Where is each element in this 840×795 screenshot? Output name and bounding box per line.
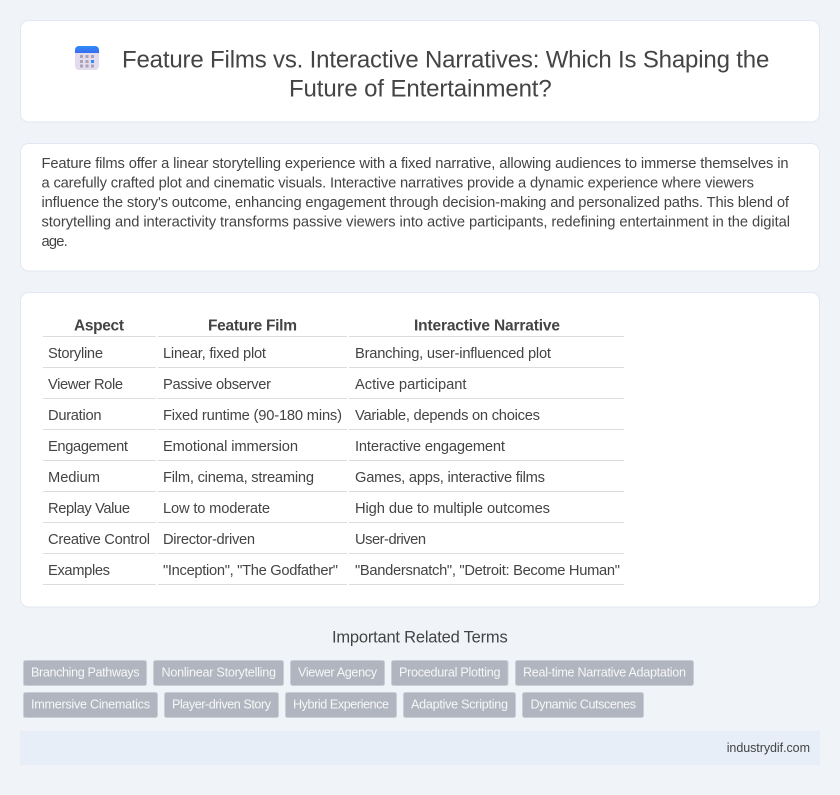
chip: immersive cinematics: Immersive Cinematics (31, 698, 150, 712)
table row: replay value: Replay Value (48, 501, 130, 517)
table row: duration: Fixed runtime (90-180 mins) (163, 408, 342, 424)
table row: creative control: Director-driven (163, 532, 255, 548)
chip: player-driven story: Player-driven Story (172, 698, 272, 712)
table row: creative control: User-driven (355, 532, 426, 548)
chip: branching pathways: Branching Pathways (31, 666, 140, 680)
title: Future of Entertainment? (289, 76, 552, 103)
table row: examples: "Bandersnatch", "Detroit: Become Human" (355, 563, 620, 579)
table row: medium: Games, apps, interactive films (355, 470, 545, 486)
title (122, 46, 769, 103)
table row: examples (48, 563, 620, 579)
chip: real-time narrative adaptation (516, 660, 694, 686)
table row: examples: Examples (48, 563, 110, 579)
table row: medium (48, 470, 545, 486)
table row: viewer role: Passive observer (163, 377, 271, 393)
chip: dynamic cutscenes (522, 692, 644, 718)
table header row (74, 318, 560, 334)
table row: engagement: Emotional immersion (163, 439, 298, 455)
chip: adaptive scripting (404, 692, 516, 718)
table row: storyline: Branching, user-influenced plot (355, 346, 551, 362)
chip: real-time narrative adaptation: Real-time Narrative Adaptation (523, 666, 686, 680)
text block: introduction paragraph: storytelling and interactivity transforms passive viewers into active participants, redefining entertainment in the digital (42, 214, 790, 230)
icon: calendar (75, 46, 99, 70)
table row: duration: Duration (48, 408, 102, 424)
table header row: Aspect (74, 318, 124, 334)
table row: duration: Variable, depends on choices (355, 408, 540, 424)
table row: engagement (48, 439, 505, 455)
text block: introduction paragraph (42, 156, 790, 250)
chip: procedural plotting: Procedural Plotting (399, 666, 500, 680)
table row: medium: Film, cinema, streaming (163, 470, 314, 486)
table row: viewer role (48, 377, 466, 393)
title: Feature Films vs. Interactive Narratives: Which Is Shaping the (122, 46, 769, 73)
table row: viewer role: Active participant (355, 377, 466, 393)
table row: storyline: Storyline (48, 346, 103, 362)
chip: adaptive scripting: Adaptive Scripting (411, 698, 508, 712)
footer: industrydif.com (727, 741, 810, 755)
chip: branching pathways (24, 660, 146, 686)
panel: header (20, 20, 820, 122)
table row: replay value (48, 501, 550, 517)
text block: introduction paragraph: influence the story's outcome, enhancing engagement through decision-making and personalized paths. This blend of (42, 195, 790, 211)
heading: important related terms: Important Related Terms (332, 628, 508, 646)
text block: introduction paragraph: age. (42, 234, 68, 250)
chip: viewer agency (290, 660, 384, 686)
table row: examples: "Inception", "The Godfather" (163, 563, 338, 579)
chip: dynamic cutscenes: Dynamic Cutscenes (530, 698, 636, 712)
chips: related terms (24, 660, 694, 718)
panel: introduction (20, 144, 820, 271)
chip: procedural plotting (392, 660, 508, 686)
panel: comparison table (20, 292, 820, 607)
table row: replay value: Low to moderate (163, 501, 270, 517)
chip: viewer agency: Viewer Agency (298, 666, 378, 680)
table row: creative control (48, 532, 426, 548)
chip: nonlinear storytelling (154, 660, 284, 686)
table row: engagement: Interactive engagement (355, 439, 505, 455)
table row: storyline (48, 346, 551, 362)
table row: viewer role: Viewer Role (48, 377, 123, 393)
table header row: Feature Film (208, 318, 297, 334)
table row: duration (48, 408, 540, 424)
table row: storyline: Linear, fixed plot (163, 346, 266, 362)
text block: introduction paragraph: Feature films offer a linear storytelling experience with a fixed narrative, allowing audiences to immerse themselves in (42, 156, 788, 172)
table row: medium: Medium (48, 470, 100, 486)
table header row: Interactive Narrative (414, 318, 560, 334)
table row: engagement: Engagement (48, 439, 128, 455)
footer (20, 731, 820, 765)
chip: nonlinear storytelling: Nonlinear Storytelling (162, 666, 276, 680)
chip: hybrid experience: Hybrid Experience (293, 698, 389, 712)
table row: creative control: Creative Control (48, 532, 150, 548)
text block: introduction paragraph: a carefully crafted plot and cinematic visuals. Interactive narratives provide a dynamic experience where viewers (42, 176, 754, 192)
chip: player-driven story (164, 692, 278, 718)
table row: replay value: High due to multiple outcomes (355, 501, 550, 517)
chip: immersive cinematics (24, 692, 158, 718)
chip: hybrid experience (286, 692, 396, 718)
